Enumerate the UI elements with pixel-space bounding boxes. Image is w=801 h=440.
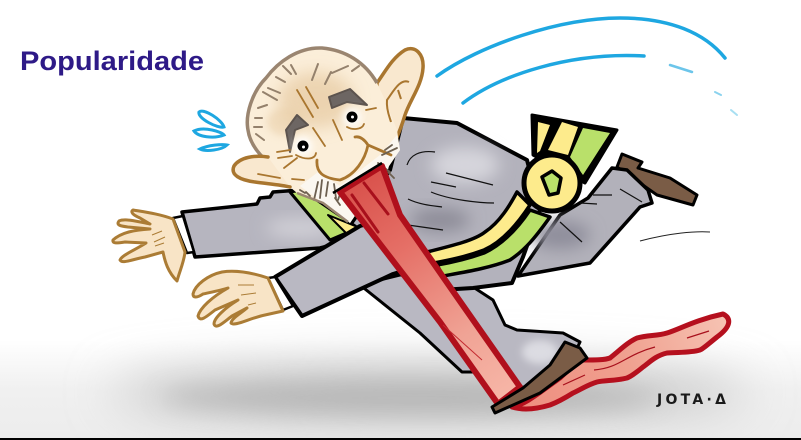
brow left: [286, 115, 308, 152]
tongue on ground: [512, 314, 729, 409]
back hand: [113, 210, 185, 281]
back arm sleeve: [182, 190, 350, 257]
back cuff: [173, 216, 194, 253]
jacket shading: [266, 147, 710, 364]
sweat drops: [194, 111, 227, 150]
front hand: [193, 271, 283, 326]
forehead shading: [278, 72, 354, 128]
beard: [300, 145, 397, 205]
eye right: [343, 108, 361, 126]
tongue strip: [333, 163, 520, 404]
title: Popularidade: [20, 46, 204, 76]
ear: [375, 49, 423, 137]
hair strokes: [254, 64, 359, 140]
front shoe: [492, 342, 587, 413]
ear inner: [387, 81, 409, 122]
face lines: [258, 87, 376, 180]
face: [247, 48, 400, 223]
head: [233, 48, 423, 223]
beard patch: [300, 135, 400, 223]
back leg: [518, 168, 652, 276]
motion streaks: [437, 18, 737, 115]
presidential sash: [427, 192, 550, 276]
smile: [317, 137, 391, 180]
back shoe: [617, 154, 697, 205]
front cuff: [268, 277, 293, 310]
front leg: [360, 270, 580, 388]
bottom border: [0, 438, 801, 440]
sash left part: [290, 190, 360, 240]
torso jacket: [340, 118, 540, 290]
front sleeve: [275, 215, 432, 316]
eye left: [294, 137, 312, 155]
sash medal: [524, 155, 580, 211]
signature: JOTA·Δ: [656, 392, 726, 408]
skull outline: [247, 48, 377, 163]
sash ribbons: [532, 115, 617, 183]
ground shadow: [0, 340, 801, 440]
nose: [233, 156, 290, 187]
brow right: [329, 89, 367, 108]
